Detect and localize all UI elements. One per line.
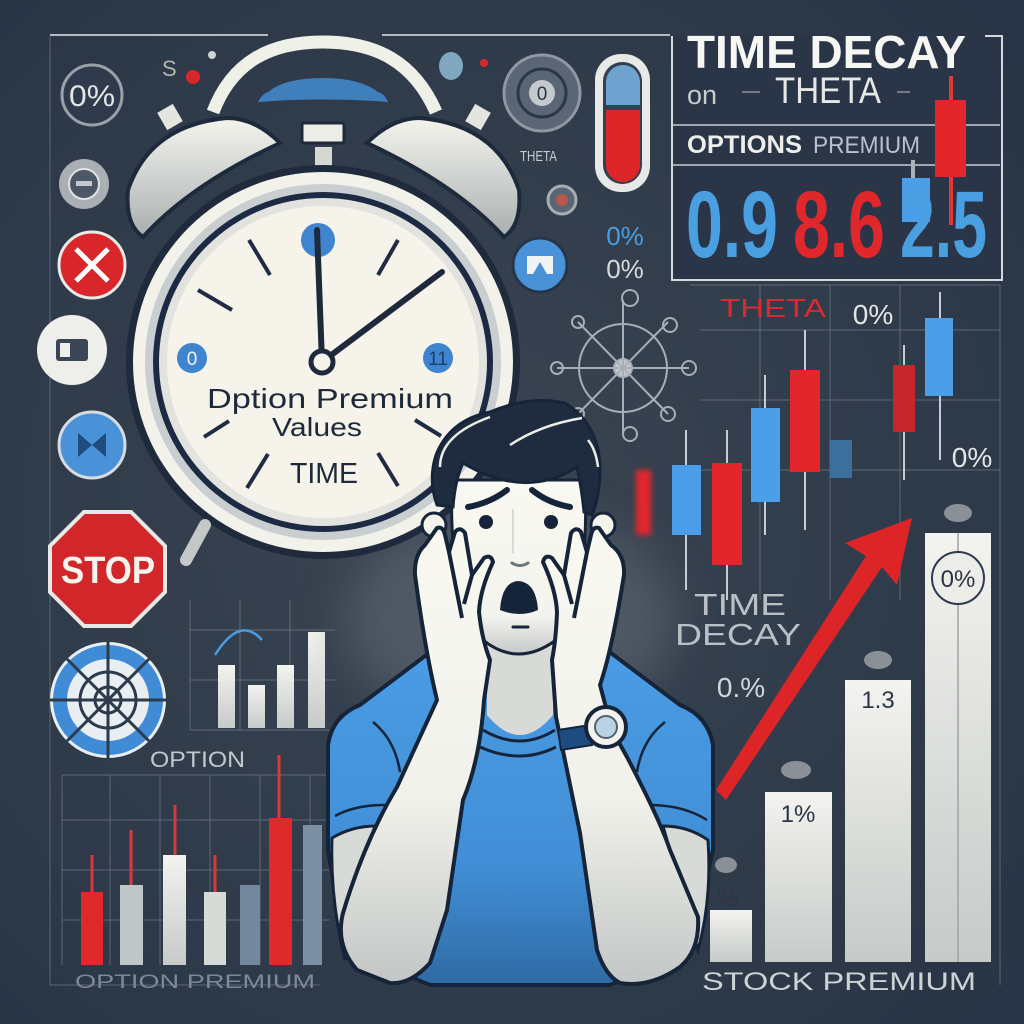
icon: target wheel [50, 642, 166, 758]
clock handle [213, 42, 436, 112]
icon: thermometer gauge [595, 54, 650, 192]
chart: rising premium bars: 0% [941, 566, 975, 593]
label: time decay: TIME [694, 587, 786, 622]
wristwatch [558, 707, 626, 750]
labels: percent pair: 0% [606, 254, 644, 284]
label: time decay [675, 587, 801, 652]
chart: lower left candles [81, 755, 322, 965]
premium values [686, 172, 987, 278]
icon: blue button [59, 412, 125, 478]
labels: percent pair: 0% [606, 221, 644, 251]
chart: mini bars [215, 630, 325, 728]
label: options premium: PREMIUM [813, 132, 920, 159]
label: option: OPTION [150, 747, 245, 772]
icon: white book button [37, 315, 107, 385]
right arm and hand [543, 528, 698, 984]
hair highlights [440, 417, 598, 467]
clock stand [186, 525, 205, 560]
icon: percent badge [62, 65, 122, 125]
label: options premium: OPTIONS [687, 131, 802, 159]
ears [422, 513, 615, 537]
icon: dial with zero [504, 55, 580, 131]
grey halo behind person [345, 510, 675, 730]
icon: red cross [59, 232, 125, 298]
upper arms [332, 826, 709, 960]
label: options premium [687, 131, 920, 159]
candlestick in title panel [935, 76, 966, 225]
clock text: TIME [290, 458, 358, 490]
clock text: Dption Premium [207, 383, 453, 414]
icon: percent badge: 0% [69, 80, 115, 113]
right bell [367, 118, 519, 237]
arrow: rising red [716, 518, 912, 800]
eyebrows and eyes [468, 490, 570, 627]
alarm clock [126, 42, 520, 560]
subtitle: on theta: on [687, 80, 717, 110]
chart: rising premium bars [710, 504, 991, 962]
blue candle behind values [902, 160, 930, 222]
open mouth [500, 581, 538, 614]
label: theta small: THETA [520, 148, 557, 165]
clock hands [311, 230, 442, 373]
label: percent upper: 0% [853, 299, 893, 330]
clock lens [258, 78, 388, 102]
label: percent right: 0% [952, 442, 992, 473]
icon: small ring [548, 186, 576, 214]
hour markers: 11 [428, 349, 448, 370]
premium values: 0.9 [686, 172, 778, 278]
icon: gray dial [59, 159, 109, 209]
icon: blue badge [513, 238, 567, 292]
clock text: Values [272, 412, 362, 442]
clock ticks [198, 240, 441, 488]
icon: small logo marks [162, 51, 216, 84]
icon: small logo marks: S [162, 56, 177, 81]
shirt creases [335, 722, 707, 820]
chart: rising premium bars: 1% [781, 801, 815, 828]
icon: dial with zero: 0 [537, 84, 547, 105]
neck [487, 640, 553, 735]
collar [480, 730, 556, 756]
clock text [207, 383, 453, 490]
premium values: 8.6 [793, 172, 885, 278]
panel: title [672, 26, 1002, 280]
hour markers: 0 [187, 349, 197, 370]
bell pegs [157, 104, 491, 130]
label: time decay: DECAY [675, 617, 801, 652]
clock ring [126, 165, 520, 559]
head [452, 480, 586, 654]
clock face [167, 206, 479, 518]
chart: rising premium bars: 1.3 [861, 687, 895, 714]
shirt [328, 650, 713, 985]
icon: pale blue and red marks [439, 52, 488, 80]
left arm and hand [341, 528, 493, 983]
label: percent mid: 0.% [717, 672, 765, 703]
label: stock premium: STOCK PREMIUM [702, 968, 976, 996]
label: option premium: OPTION PREMIUM [75, 972, 315, 993]
label: theta red: THETA [720, 293, 827, 323]
chart: upper right candles [636, 292, 953, 600]
icon: network diagram [551, 290, 696, 441]
person [328, 400, 713, 985]
icon: stop sign: STOP [61, 550, 155, 592]
left bell [128, 118, 280, 237]
subtitle: on theta: THETA [775, 70, 881, 111]
chart: rising premium bars: % [717, 886, 739, 913]
hair [432, 400, 600, 515]
subtitle: on theta [687, 70, 881, 111]
hour markers [177, 223, 453, 373]
title: time decay: TIME DECAY [687, 26, 966, 78]
clock crown [302, 123, 344, 175]
icon: stop sign [50, 512, 165, 626]
labels: percent pair [606, 221, 644, 284]
